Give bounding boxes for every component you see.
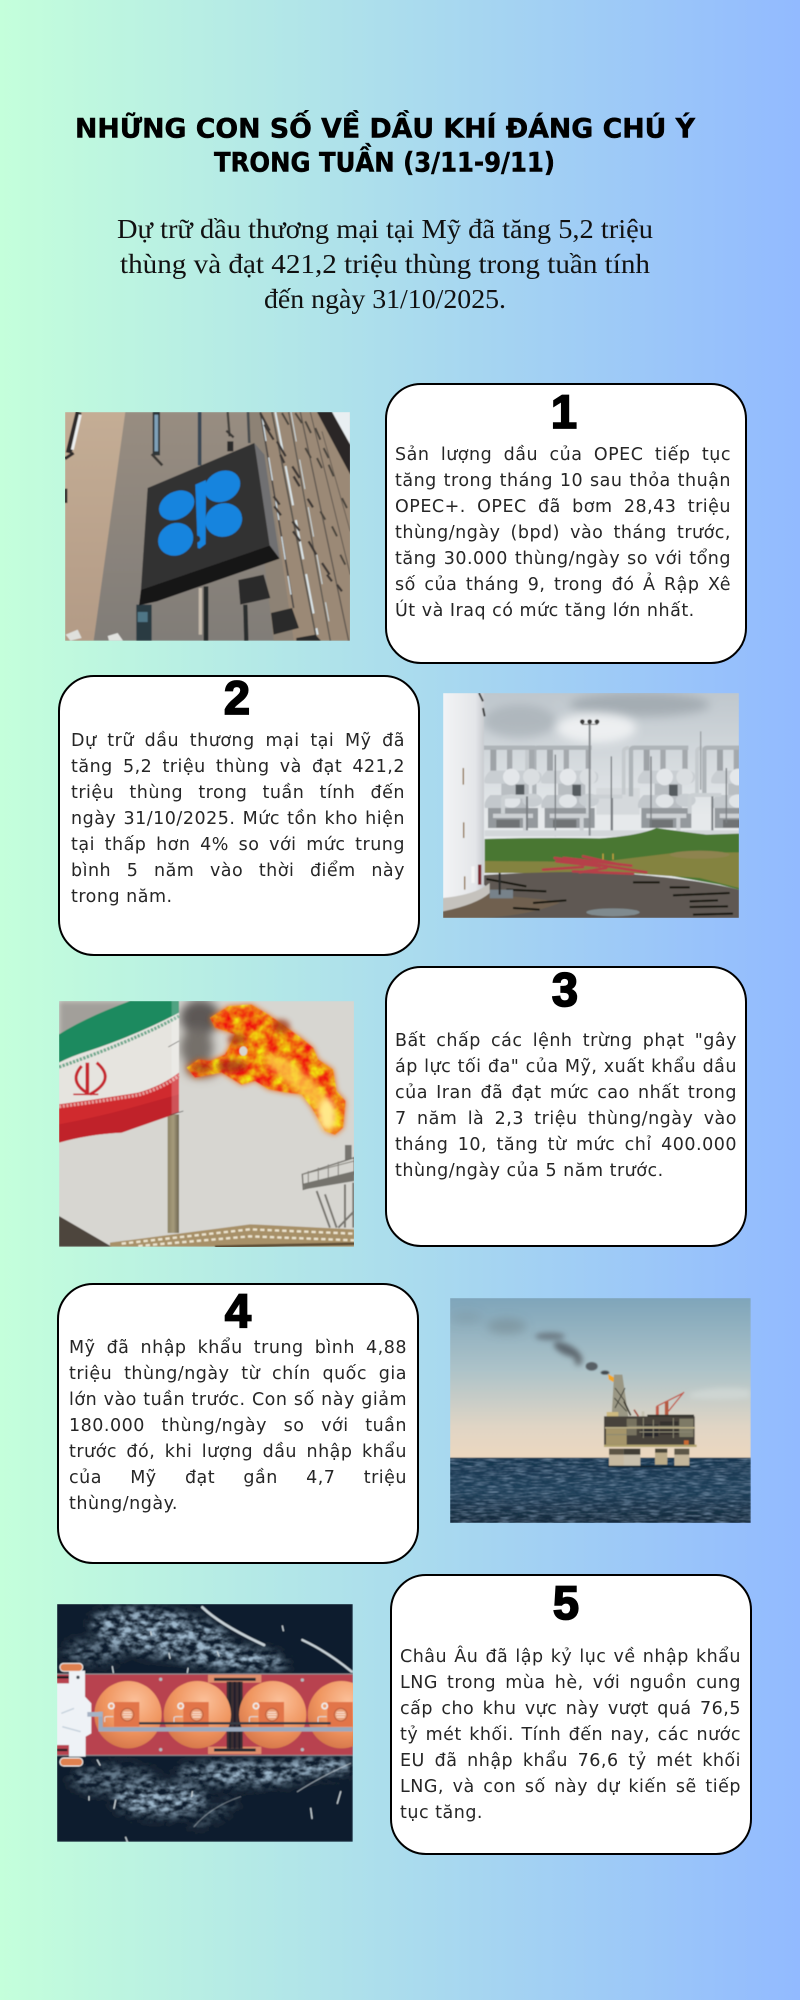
number 4: 4 (225, 1284, 251, 1337)
panel: fact 1 (385, 383, 747, 664)
text: fact 2 (71, 730, 405, 907)
text: fact 5: Châu Âu đã lập kỷ lục về nhập khẩu (400, 1647, 741, 1667)
text: fact 3: áp lực tối đa" của Mỹ, xuất khẩu dầu (395, 1057, 737, 1077)
text: fact 3: của Iran đã đạt mức cao nhất trong (395, 1083, 737, 1103)
photo: offshore oil platform (450, 1298, 751, 1523)
text: fact 1: Út và Iraq có mức tăng lớn nhất. (395, 601, 695, 621)
text: fact 1: tăng 30.000 thùng/ngày so với tổng (395, 549, 731, 569)
text: fact 2: ngày 31/10/2025. Mức tồn kho hiện (71, 809, 405, 829)
legs (609, 1449, 624, 1467)
smoke (180, 1000, 220, 1078)
red pipes (543, 857, 647, 874)
panel: fact 5 (390, 1574, 752, 1855)
text: fact 5 (400, 1646, 741, 1823)
title: NHỮNG CON SỐ VỀ DẦU KHÍ ĐÁNG CHÚ Ý (75, 110, 695, 144)
cranes (661, 1402, 672, 1417)
tank (443, 693, 490, 910)
sea ripples (450, 1459, 751, 1523)
text: fact 4: thùng/ngày. (69, 1494, 178, 1514)
text: fact 4: của Mỹ đạt gần 4,7 triệu (69, 1468, 407, 1488)
text: fact 5: cấp cho khu vực này vượt quá 76,5 (400, 1699, 741, 1719)
emblem (73, 1063, 105, 1095)
sign (254, 443, 279, 559)
rig tower (612, 1375, 629, 1417)
flag (59, 1001, 179, 1143)
photo: OPEC headquarters sign (65, 412, 350, 641)
text: fact 1 (395, 444, 731, 621)
number 5: 5 (553, 1576, 579, 1629)
OPEC logo (152, 464, 246, 562)
platform (59, 1216, 112, 1247)
text: fact 1: OPEC+. OPEC đã bơm 28,43 triệu (395, 497, 731, 517)
cameras (65, 630, 81, 641)
text: fact 5: EU đã nhập khẩu 76,6 tỷ mét khối (400, 1751, 741, 1771)
text: fact 4: 180.000 thùng/ngày so với tuần (69, 1416, 407, 1436)
text: fact 2: triệu thùng trong tuần tính đến (71, 783, 405, 803)
subtitle: thùng và đạt 421,2 triệu thùng trong tuần tính (120, 249, 651, 279)
deck (607, 1412, 619, 1427)
text: fact 2: trong năm. (71, 887, 173, 907)
deck (57, 1674, 353, 1755)
photo: LNG carrier from above (57, 1604, 353, 1842)
number 1: 1 (551, 385, 577, 438)
text: fact 5: tỷ mét khối. Tính đến nay, các nước (400, 1725, 741, 1745)
photo: oil storage facility (443, 693, 739, 918)
text: fact 4 (69, 1337, 407, 1514)
text: fact 3: Bất chấp các lệnh trừng phạt "gây (395, 1031, 737, 1051)
text: fact 5: LNG, và con số này dự kiến sẽ tiếp (400, 1777, 741, 1797)
text: fact 5: LNG trong mùa hè, với nguồn cung (400, 1673, 741, 1693)
number 3: 3 (552, 963, 578, 1016)
tower (345, 1145, 352, 1169)
title: TRONG TUẦN (3/11-9/11) (214, 144, 555, 178)
lower boxes (238, 575, 270, 605)
subtitle (117, 214, 654, 314)
text: fact 1: tăng trong tháng 10 sau thỏa thuận (395, 471, 731, 491)
text: fact 2: bình 5 năm vào thời điểm này (71, 861, 405, 881)
text: fact 1: số của tháng 9, trong đó Ả Rập Xê (395, 575, 731, 595)
flame (187, 1005, 346, 1135)
text: fact 4: lớn vào tuần trước. Con số này giảm (69, 1390, 407, 1410)
text: fact 2: Dự trữ dầu thương mại tại Mỹ đã (71, 731, 405, 751)
text: fact 5: tục tăng. (400, 1803, 483, 1823)
spheres (94, 1681, 162, 1748)
photo: Iranian flag and gas flare (59, 1001, 354, 1247)
text: fact 1: thùng/ngày (bpd) vào tháng trước, (395, 523, 731, 543)
panel: fact 3 (385, 966, 747, 1247)
title (75, 110, 696, 178)
text: fact 3: 7 năm là 2,3 triệu thùng/ngày vào (395, 1109, 737, 1129)
pipes (139, 1720, 331, 1727)
text: fact 4: trước đó, khi lượng dầu nhập khẩu (69, 1442, 407, 1462)
panel: fact 2 (58, 674, 420, 956)
street light (587, 723, 593, 836)
foam (57, 1604, 353, 1842)
text: fact 1: Sản lượng dầu của OPEC tiếp tục (395, 445, 731, 465)
flare (608, 1374, 615, 1382)
text: fact 4: triệu thùng/ngày từ chín quốc gia (69, 1364, 407, 1384)
grass and ground (485, 828, 739, 890)
text: fact 2: tăng 5,2 triệu thùng và đạt 421,2 (71, 757, 405, 777)
subtitle: đến ngày 31/10/2025. (264, 284, 506, 314)
number 2: 2 (224, 671, 250, 724)
smoke (450, 1312, 527, 1335)
text: fact 2: tại thấp hơn 4% so với mức trung (71, 835, 405, 855)
text: fact 3: thùng/ngày của 5 năm trước. (395, 1161, 664, 1181)
text: fact 3 (395, 1031, 737, 1181)
subtitle: Dự trữ dầu thương mại tại Mỹ đã tăng 5,2 triệu (117, 214, 654, 244)
text: fact 4: Mỹ đã nhập khẩu trung bình 4,88 (69, 1338, 407, 1358)
lifeboats (60, 1663, 83, 1671)
windows (65, 412, 350, 641)
bridge (57, 1671, 91, 1757)
text: fact 3: tháng 10, tăng từ mức chỉ 400.000 (395, 1135, 737, 1155)
T-pipes (503, 795, 722, 814)
panel: fact 4 (56, 1282, 418, 1564)
